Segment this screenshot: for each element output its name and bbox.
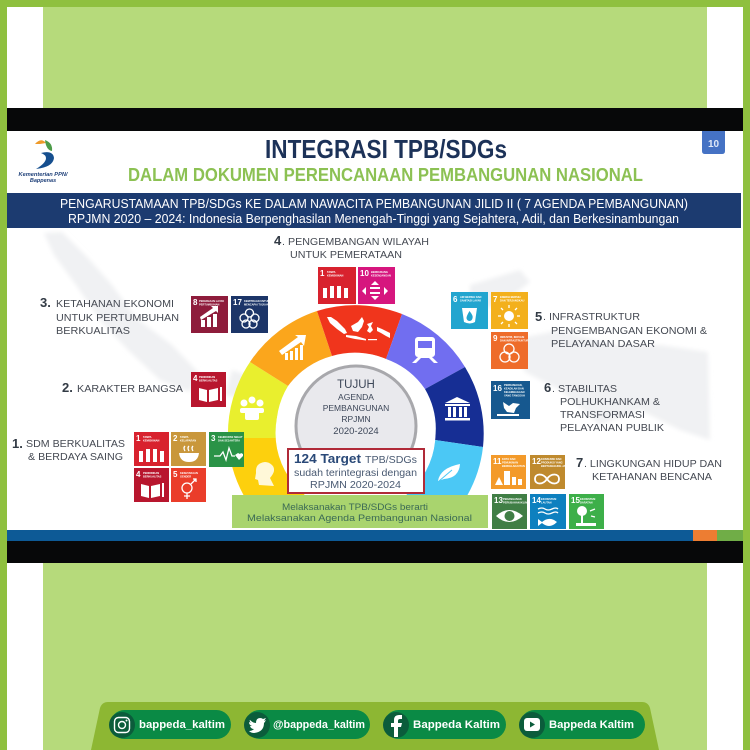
twitter handle — [244, 710, 370, 739]
agenda 2 label — [62, 380, 183, 395]
SDG tile: 10: 10 — [360, 269, 369, 278]
title: INTEGRASI TPB/SDGs — [265, 134, 507, 164]
SDG tile: 8: PERTUMBUHAN — [199, 302, 219, 306]
agenda 4 label: 4 — [274, 233, 282, 248]
navy heading band: PENGARUSTAMAAN TPB/SDGs KE DALAM NAWACITA PEMBANGUNAN JILID II ( 7 AGENDA PEMBANGUNAN) — [60, 196, 688, 211]
navy heading band — [7, 193, 741, 228]
segment: wilayah, red — [317, 305, 402, 359]
SDG tile: 1, agenda 4: TANPA — [327, 270, 336, 274]
SDG tile: 1, agenda 1: KEMISKINAN — [143, 438, 160, 442]
agenda 4 label: UNTUK PEMERATAAN — [290, 249, 402, 261]
SDG tile: 10: BERKURANG — [371, 270, 388, 274]
SDG tile: 11: PEMUKIMAN — [502, 460, 518, 464]
agenda 6 label: PELAYANAN PUBLIK — [560, 422, 664, 434]
center disc: 2020-2024 — [333, 426, 379, 437]
SDG tile: 4: PENDIDIKAN — [143, 471, 159, 475]
SDG tile: 5: 5 — [173, 470, 178, 479]
SDG tile: 4, agenda 2: PENDIDIKAN — [199, 375, 215, 379]
agenda 6 label: 6 — [544, 380, 551, 395]
callout: 124 target: RPJMN 2020-2024 — [310, 480, 401, 491]
bottom black band — [7, 541, 743, 563]
social media banner — [91, 702, 659, 750]
subtitle: DALAM DOKUMEN PERENCANAAN PEMBANGUNAN NASIONAL — [128, 164, 643, 185]
green statement box: Melaksanakan Agenda Pembangunan Nasional — [247, 513, 472, 524]
SDG tile: 4: 4 — [136, 470, 141, 479]
SDG tile: 8: 8 — [193, 298, 198, 307]
agenda 2 label: KARAKTER BANGSA — [77, 383, 183, 395]
agenda 3 label: 3. — [40, 295, 51, 310]
SDG tile: 5: GENDER — [180, 474, 191, 478]
SDG tile: 16: KEADILAN DAN — [504, 386, 524, 390]
SDG tile: 16 — [491, 381, 530, 419]
SDG tile: 7 — [491, 292, 528, 329]
SDG tile: 1, agenda 1: 1 — [136, 434, 141, 443]
agenda 6 label: POLHUKHANKAM & — [560, 396, 660, 408]
SDG tile: 2: TANPA — [180, 435, 189, 439]
instagram handle — [109, 710, 231, 739]
SDG tile: 16: YANG TANGGUH — [504, 394, 525, 398]
SDG tile: 2: 2 — [173, 434, 178, 443]
SDG tile: 8 — [191, 296, 228, 333]
SDG tile: 4, agenda 2: BERKUALITAS — [199, 378, 218, 382]
agenda 3 label: UNTUK PERTUMBUHAN — [56, 312, 179, 324]
logo: Kementerian PPN/Bappenas: Kementerian PPN/ — [18, 172, 69, 178]
SDG tile: 17: MENCAPAI TUJUAN — [244, 302, 269, 306]
callout: 124 target: TPB/SDGs — [365, 455, 417, 466]
SDG tile: 1, agenda 4: 1 — [320, 269, 325, 278]
SDG tile: 14: 14 — [532, 496, 541, 505]
SDG tile: 16: KELEMBAGAAN — [504, 390, 525, 394]
twitter handle: @bappeda_kaltim — [273, 719, 365, 731]
SDG tile: 9: DAN INFRASTRUKTUR — [500, 338, 529, 342]
agenda 7 label: KETAHANAN BENCANA — [592, 471, 712, 483]
SDG tile: 14: LAUTAN — [541, 500, 552, 504]
agenda 3 label: KETAHANAN EKONOMI — [56, 298, 174, 310]
SDG tile: 1, agenda 4: KEMISKINAN — [327, 274, 344, 278]
SDG tile: 12: KONSUMSI DAN — [541, 457, 561, 461]
green statement box — [232, 495, 488, 528]
SDG tile: 15: EKOSISTEM — [580, 497, 595, 501]
SDG tile: 7: DAN TERJANGKAU — [500, 298, 524, 302]
center disc: AGENDA — [338, 392, 374, 402]
SDG tile: 10: KESENJANGAN — [371, 274, 391, 278]
SDG tile: 2: KELAPARAN — [180, 438, 196, 442]
SDG tile: 11: 11 — [493, 457, 502, 466]
segment: karakter, lime yellow — [228, 362, 288, 438]
SDG tile: 6: AIR BERSIH DAN — [460, 295, 481, 299]
SDG tile: 1, agenda 1 — [134, 432, 169, 466]
callout: 124 target: sudah terintegrasi dengan — [294, 468, 417, 479]
SDG tile: 9 — [491, 332, 529, 369]
SDG tile: 4, agenda 2: 4 — [193, 374, 198, 383]
page number badge: 10 — [708, 139, 719, 150]
SDG tile: 13 — [492, 494, 527, 529]
SDG tile: 5 — [171, 468, 206, 502]
navy heading band: RPJMN 2020 – 2024: Indonesia Berpenghasilan Menengah-Tinggi yang Sejahtera, Adil, dan Berkesinambungan — [68, 211, 679, 226]
SDG tile: 12: BERTANGGUNG JAWAB — [541, 464, 571, 468]
logo: Kementerian PPN/Bappenas — [18, 140, 69, 184]
SDG tile: 4 — [134, 468, 169, 502]
agenda 6 label — [544, 380, 664, 434]
segment: infrastruktur, purple — [386, 314, 465, 389]
callout: 124 target — [288, 449, 424, 493]
center disc: TUJUH — [337, 379, 375, 391]
agenda 5 label — [535, 309, 707, 350]
SDG tile: 1, agenda 4 — [318, 267, 356, 304]
SDG tile: 17: 17 — [233, 298, 242, 307]
SDG tile: 8: PEKERJAAN LAYAK — [199, 299, 224, 303]
SDG tile: 17 — [231, 296, 269, 333]
segment: polhukhankam, navy — [425, 367, 484, 447]
agenda 2 label: 2. — [62, 380, 73, 395]
logo: Kementerian PPN/Bappenas: Bappenas — [30, 178, 56, 184]
SDG tile: 12: PRODUKSI YANG — [541, 460, 563, 464]
facebook handle: Bappeda Kaltim — [413, 719, 500, 731]
SDG tile: 2 — [171, 432, 206, 466]
instagram handle: bappeda_kaltim — [139, 719, 225, 731]
SDG tile: 9: 9 — [493, 334, 498, 343]
SDG tile: 3: 3 — [211, 434, 216, 443]
youtube handle — [519, 710, 645, 739]
facebook handle — [383, 710, 506, 739]
agenda 4 label: . PENGEMBANGAN WILAYAH — [282, 236, 429, 248]
SDG tile: 9: INDUSTRI, INOVASI — [500, 335, 524, 339]
SDG tile: 14 — [530, 494, 566, 529]
agenda 5 label: 5 — [535, 309, 542, 324]
icon: government building — [445, 397, 470, 420]
center disc — [276, 353, 436, 513]
bottom slide strip — [7, 530, 743, 541]
agenda 1 label: SDM BERKUALITAS — [26, 438, 125, 450]
icon: head with gears — [255, 462, 274, 486]
SDG tile: 12: 12 — [532, 457, 541, 466]
center disc: RPJMN — [341, 414, 371, 424]
agenda 3 label: BERKUALITAS — [56, 325, 130, 337]
icon: train — [412, 337, 438, 363]
agenda 7 label — [576, 455, 722, 483]
SDG tile: 17: KEMITRAAN UNTUK — [244, 299, 269, 303]
green statement box: Melaksanakan TPB/SDGs berarti — [282, 502, 428, 513]
SDG tile: 11: BERKELANJUTAN — [502, 464, 525, 468]
agenda 3 label — [40, 295, 179, 337]
icon: Indonesia map — [327, 317, 390, 340]
agenda 1 label — [12, 436, 125, 463]
SDG tile: 6 — [451, 292, 488, 329]
SDG tile: 6: 6 — [453, 295, 458, 304]
SDG tile: 15: 15 — [571, 496, 580, 505]
SDG tile: 16: 16 — [493, 384, 502, 393]
SDG tile: 15 — [569, 494, 604, 529]
slide panel — [7, 131, 743, 541]
SDG tile: 16: PERDAMAIAN, — [504, 383, 523, 387]
icon: rising chart — [279, 335, 306, 360]
top black band — [7, 108, 743, 131]
SDG tile: 3: KEHIDUPAN SEHAT — [218, 435, 243, 439]
icon: people — [240, 396, 264, 420]
SDG tile: 13: PERUBAHAN IKLIM — [503, 500, 527, 504]
agenda 5 label: . INFRASTRUKTUR — [543, 311, 640, 323]
SDG tile: 10 — [358, 267, 395, 304]
map background: Indonesia silhouette — [44, 232, 710, 440]
SDG tile: 11: KOTA DAN — [502, 457, 516, 461]
SDG tile: 12 — [530, 455, 571, 489]
agenda 4 label — [274, 233, 429, 261]
page number badge — [702, 131, 725, 154]
SDG tile: 5: KESETARAAN — [180, 471, 198, 475]
SDG tile: 1, agenda 1: TANPA — [143, 435, 152, 439]
SDG tile: 14: EKOSISTEM — [541, 497, 556, 501]
SDG tile: 7: 7 — [493, 295, 498, 304]
agenda 6 label: . STABILITAS — [552, 383, 617, 395]
callout: 124 target: 124 Target — [294, 451, 362, 466]
SDG tile: 4: BERKUALITAS — [143, 474, 162, 478]
agenda 5 label: PELAYANAN DASAR — [551, 338, 655, 350]
segment: ekonomi, orange — [250, 311, 332, 386]
agenda 7 label: 7 — [576, 455, 583, 470]
SDG tile: 13: 13 — [494, 496, 503, 505]
SDG tile: 3 — [209, 432, 244, 467]
SDG tile: 15: DARATAN — [580, 500, 593, 504]
center disc: PEMBANGUNAN — [323, 403, 389, 413]
agenda 7 label: . LINGKUNGAN HIDUP DAN — [584, 458, 722, 470]
SDG tile: 3: DAN SEJAHTERA — [218, 438, 240, 442]
SDG tile: 7: ENERGI BERSIH — [500, 295, 521, 299]
agenda ring chart — [228, 305, 484, 513]
youtube handle: Bappeda Kaltim — [549, 719, 634, 731]
SDG tile: 11 — [491, 455, 526, 489]
icon: leaf — [438, 464, 460, 481]
segment: SDM, yellow — [228, 438, 305, 495]
agenda 6 label: TRANSFORMASI — [560, 409, 645, 421]
agenda 1 label: 1. — [12, 436, 23, 451]
SDG tile: 6: SANITASI LAYAK — [460, 298, 481, 302]
agenda 5 label: PENGEMBANGAN EKONOMI & — [551, 325, 707, 337]
agenda 1 label: & BERDAYA SAING — [28, 451, 123, 463]
SDG tile: 13: PENANGANAN — [503, 497, 522, 501]
segment: lingkungan, light blue — [406, 440, 483, 495]
SDG tile: 4, agenda 2 — [191, 372, 226, 407]
